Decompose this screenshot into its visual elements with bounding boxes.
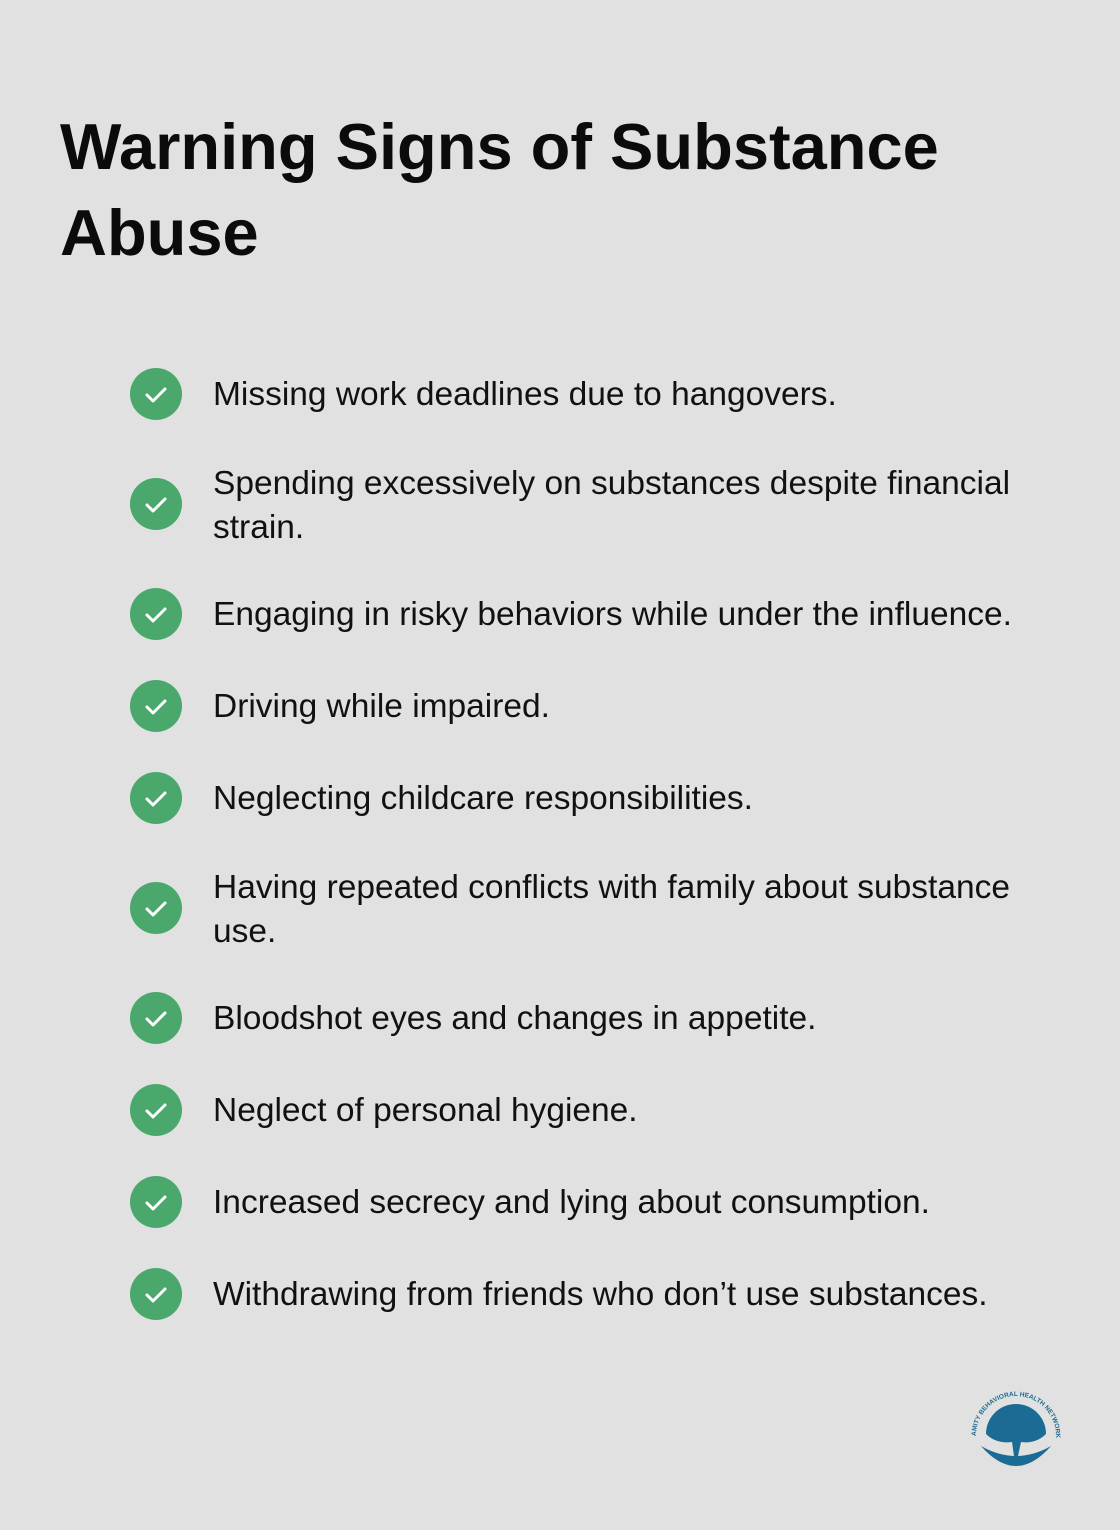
logo [972, 1392, 1060, 1466]
item 10 [130, 1268, 988, 1320]
item 2 [130, 465, 1010, 546]
item 1 [130, 368, 837, 420]
title: Warning Signs of Substance Abuse [60, 110, 939, 269]
item 6 [130, 869, 1010, 950]
item 8: Neglect of personal hygiene. [213, 1092, 638, 1129]
logo: AMITY BEHAVIORAL HEALTH NETWORK [972, 1392, 1060, 1438]
item 1: Missing work deadlines due to hangovers. [213, 376, 837, 413]
item 8 [130, 1084, 638, 1136]
item 9 [130, 1176, 930, 1228]
item 6: use. [213, 913, 276, 950]
item 10: Withdrawing from friends who don’t use substances. [213, 1276, 988, 1313]
item 2: strain. [213, 509, 304, 546]
item 4 [130, 680, 550, 732]
item 3 [130, 588, 1012, 640]
item 4: Driving while impaired. [213, 688, 550, 725]
item 9: Increased secrecy and lying about consumption. [213, 1184, 930, 1221]
item 5: Neglecting childcare responsibilities. [213, 780, 753, 817]
item 3: Engaging in risky behaviors while under the influence. [213, 596, 1012, 633]
item 7: Bloodshot eyes and changes in appetite. [213, 1000, 816, 1037]
item 2: Spending excessively on substances despite financial [213, 465, 1010, 502]
item 7 [130, 992, 816, 1044]
item 5 [130, 772, 753, 824]
item 6: Having repeated conflicts with family about substance [213, 869, 1010, 906]
